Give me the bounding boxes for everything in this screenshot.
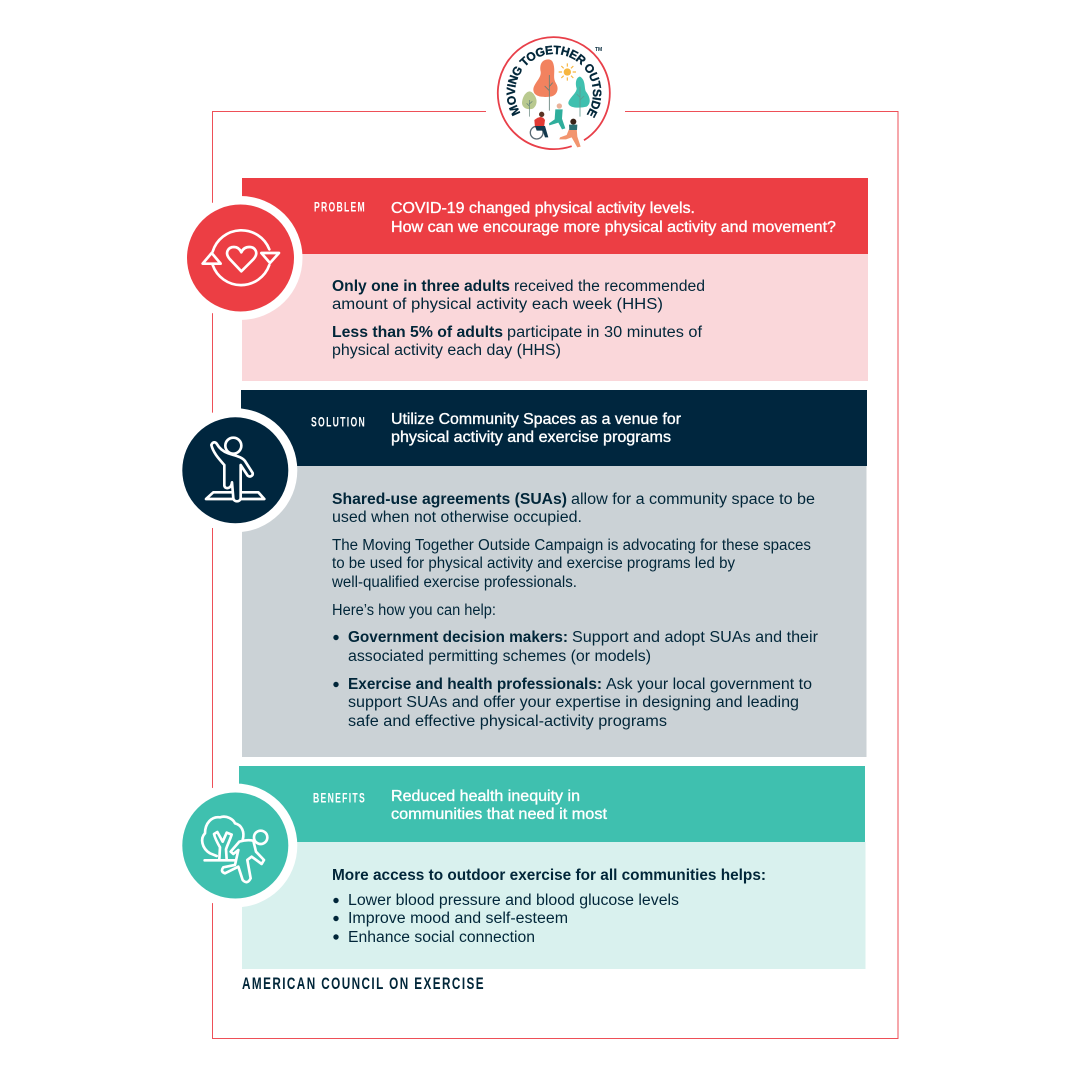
logo: Moving Together Outside <box>496 36 611 150</box>
problem stat one: received the recommended <box>514 278 705 295</box>
bullet: exercise and health professionals: support SUAs and offer your expertise in designing and leading <box>348 694 799 711</box>
problem stat two: participate in 30 minutes of <box>507 324 703 341</box>
campaign text: The Moving Together Outside Campaign is advocating for these spaces <box>332 537 811 554</box>
solution label: SOLUTION <box>311 414 366 430</box>
help intro: Here’s how you can help: <box>332 602 496 619</box>
problem stat one: Only one in three adults <box>332 278 510 295</box>
problem heading: COVID-19 changed physical activity levels. <box>391 200 695 217</box>
benefits header band <box>239 766 865 842</box>
icon: person stepping onto mat <box>173 408 297 532</box>
benefits list: Enhance social connection <box>348 929 535 946</box>
panel: solution <box>173 390 867 757</box>
bullet: exercise and health professionals: Exercise and health professionals: <box>348 676 602 693</box>
shared-use agreements text: used when not otherwise occupied. <box>332 509 582 526</box>
logo ring <box>498 37 610 149</box>
solution heading: Utilize Community Spaces as a venue for <box>391 411 681 428</box>
bullet: government decision makers: associated permitting schemes (or models) <box>348 648 651 665</box>
problem body background <box>242 254 868 381</box>
bullet: government decision makers: Government decision makers: <box>348 629 568 646</box>
logo illustration <box>522 59 590 147</box>
icon: person running past tree <box>173 784 297 908</box>
problem label: PROBLEM <box>314 200 366 214</box>
solution header band <box>241 390 867 466</box>
campaign text <box>331 537 811 591</box>
benefits intro: More access to outdoor exercise for all communities helps: <box>332 867 766 884</box>
benefits label: BENEFITS <box>313 790 366 806</box>
solution heading <box>391 411 681 446</box>
bullet: government decision makers <box>333 629 818 665</box>
problem stat two: physical activity each day (HHS) <box>332 342 561 359</box>
problem stat two: Less than 5% of adults <box>332 324 503 341</box>
solution body background <box>242 466 866 757</box>
campaign text: well-qualified exercise professionals. <box>331 574 577 591</box>
campaign text: to be used for physical activity and exercise programs led by <box>332 555 735 572</box>
problem stat two <box>332 324 703 359</box>
bullet: exercise and health professionals <box>333 676 812 730</box>
shared-use agreements text: allow for a community space to be <box>571 491 815 508</box>
problem stat one: amount of physical activity each week (HHS) <box>332 296 663 313</box>
shared-use agreements text <box>332 491 815 526</box>
benefits list: Lower blood pressure and blood glucose levels <box>348 892 679 909</box>
bullet: exercise and health professionals: Ask your local government to <box>606 676 812 693</box>
problem heading <box>391 200 836 236</box>
footer: organization name: AMERICAN COUNCIL ON EXERCISE <box>242 975 485 993</box>
benefits heading: communities that need it most <box>391 806 608 823</box>
problem stat one <box>332 278 705 313</box>
problem heading: How can we encourage more physical activity and movement? <box>391 219 836 236</box>
bullet: government decision makers: Support and adopt SUAs and their <box>572 629 818 646</box>
page frame <box>212 112 898 1038</box>
benefits heading: Reduced health inequity in <box>391 788 580 805</box>
solution heading: physical activity and exercise programs <box>391 429 671 446</box>
benefits body background <box>242 842 866 969</box>
problem header band <box>242 178 868 254</box>
benefits list: Improve mood and self-esteem <box>348 910 568 927</box>
benefits heading <box>391 788 608 823</box>
shared-use agreements text: Shared-use agreements (SUAs) <box>332 491 567 508</box>
bullet: exercise and health professionals: safe and effective physical-activity programs <box>348 713 667 730</box>
panel: benefits <box>173 766 866 969</box>
logo trademark: TM <box>595 47 602 53</box>
logo curved text: MOVING TOGETHER OUTSIDE <box>506 46 602 118</box>
icon: heart with cycle arrows <box>178 196 302 320</box>
panel: problem <box>178 178 868 381</box>
benefits list <box>333 892 679 946</box>
